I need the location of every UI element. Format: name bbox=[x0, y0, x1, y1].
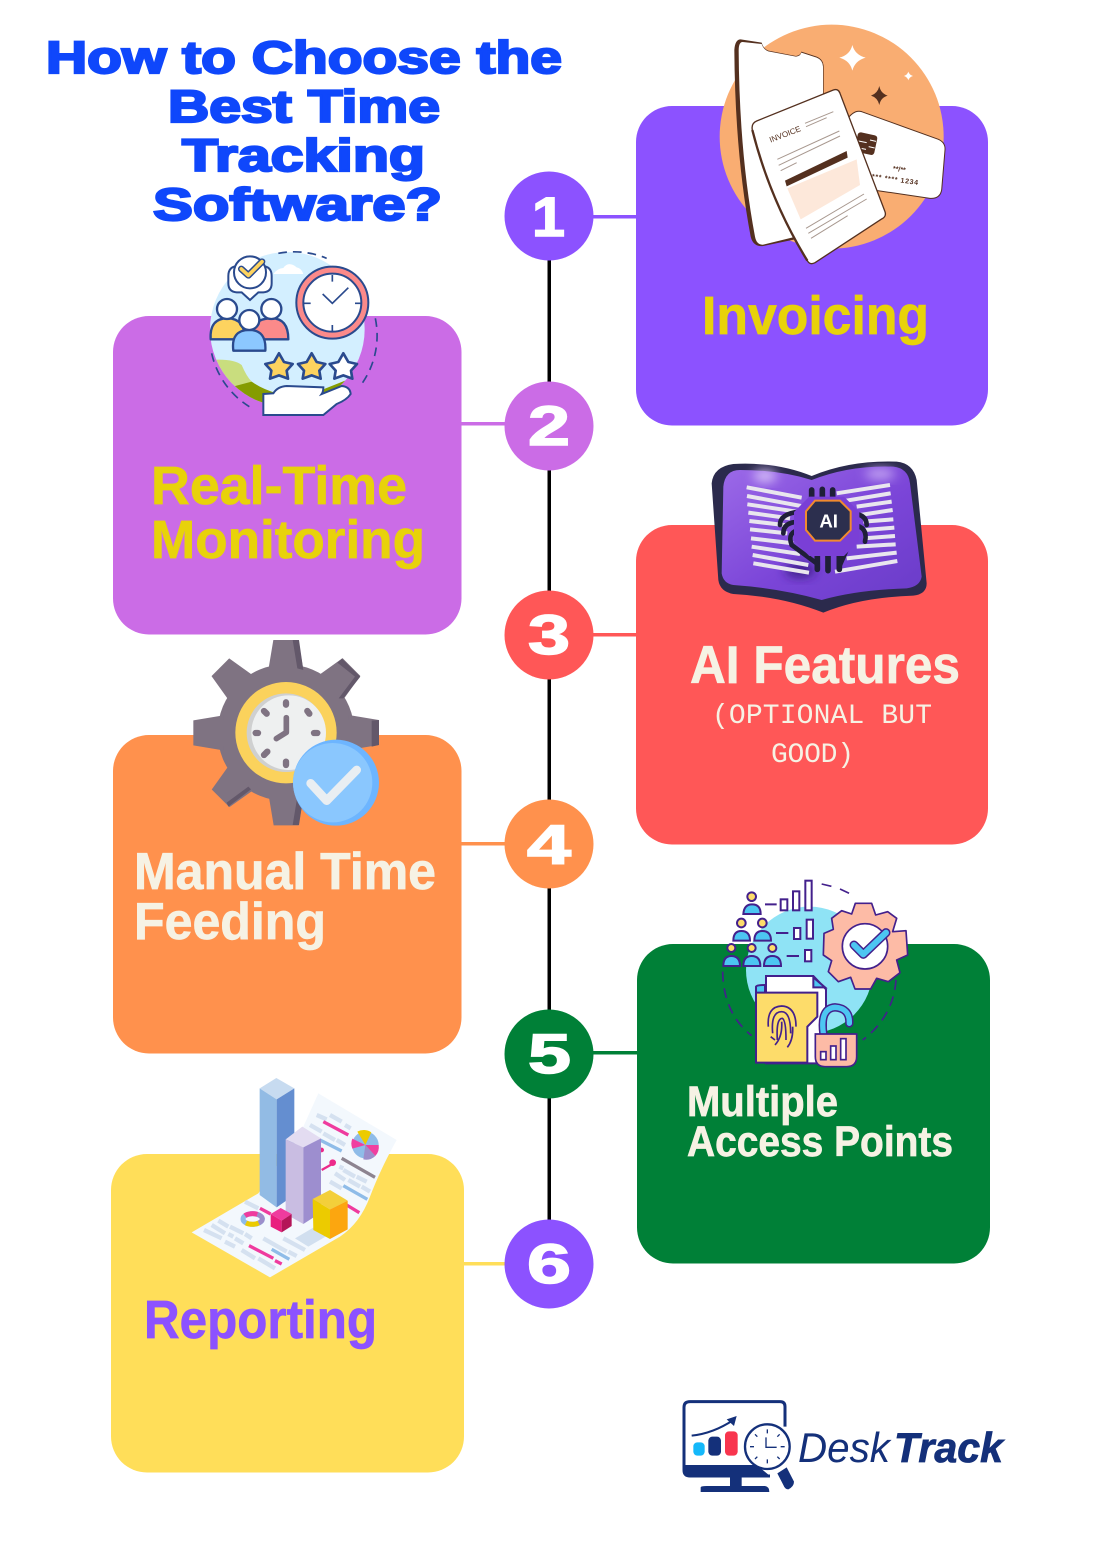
open padlock bbox=[815, 1007, 857, 1067]
step marker 3: 3 bbox=[528, 603, 570, 666]
title: Software? bbox=[153, 179, 442, 230]
yellow cube bbox=[313, 1190, 348, 1239]
title: Best Time bbox=[168, 81, 440, 132]
lilac bar bbox=[286, 1127, 321, 1224]
step marker 6: 6 bbox=[527, 1232, 571, 1295]
step marker 6 bbox=[504, 1220, 594, 1308]
connector 2 bbox=[459, 422, 507, 426]
step marker 4: 4 bbox=[527, 813, 571, 876]
step marker 4 bbox=[504, 800, 594, 888]
step marker 1 bbox=[504, 172, 594, 260]
invoice sheet bbox=[752, 90, 885, 264]
pink cube bbox=[271, 1208, 292, 1232]
people bbox=[211, 299, 288, 351]
step marker 5: 5 bbox=[528, 1022, 571, 1085]
connector 1 bbox=[590, 215, 638, 218]
gear with check bbox=[823, 903, 908, 989]
subheading: optional but good bbox=[712, 701, 932, 771]
heading: reporting: Reporting bbox=[144, 1290, 377, 1350]
logo wordmark: Track bbox=[894, 1424, 1006, 1471]
heading: manual time feeding bbox=[134, 843, 436, 951]
heading: ai features: AI Features bbox=[690, 636, 960, 695]
clock bbox=[296, 267, 368, 339]
logo icon bbox=[684, 1402, 794, 1492]
heading: invoicing: Invoicing bbox=[702, 286, 929, 346]
phone bbox=[734, 39, 824, 246]
fingerprint folder bbox=[756, 976, 826, 1063]
step marker 1: 1 bbox=[532, 185, 565, 248]
logo wordmark: Desk bbox=[798, 1424, 892, 1471]
hand bbox=[263, 386, 351, 415]
logo wordmark bbox=[798, 1424, 1006, 1471]
subheading: optional but good: GOOD) bbox=[771, 740, 854, 771]
donut chart bbox=[243, 1214, 262, 1224]
heading: real-time monitoring: Monitoring bbox=[151, 510, 425, 570]
step marker 2: 2 bbox=[528, 394, 570, 457]
heading: manual time feeding: Manual Time bbox=[134, 843, 436, 901]
connector 3 bbox=[590, 633, 638, 636]
panel: multiple access points bbox=[637, 881, 990, 1264]
invoice sheet: INVOICE bbox=[768, 124, 802, 145]
connector 6 bbox=[462, 1262, 508, 1266]
panel: invoicing bbox=[636, 25, 988, 425]
title: How to Choose the bbox=[46, 32, 562, 83]
ai chip: AI bbox=[819, 510, 838, 531]
icon: team, clock and ratings bbox=[210, 252, 377, 415]
logo: desktrack bbox=[684, 1402, 1006, 1492]
title bbox=[46, 32, 562, 230]
heading: multiple access points: Multiple bbox=[687, 1078, 838, 1126]
icon: invoice and payment card bbox=[720, 25, 945, 264]
heading: multiple access points bbox=[687, 1078, 953, 1166]
panel: reporting bbox=[111, 1078, 464, 1472]
panel: ai features bbox=[636, 462, 988, 844]
heading: real-time monitoring: Real-Time bbox=[151, 456, 407, 516]
icon: report with 3d bars bbox=[192, 1078, 397, 1277]
title: Tracking bbox=[182, 130, 425, 181]
payment card: **/** bbox=[892, 166, 906, 174]
payment card: **** **** 1234 bbox=[868, 173, 919, 187]
signal bars bbox=[765, 881, 813, 961]
heading: manual time feeding: Feeding bbox=[134, 893, 326, 951]
icon: ai book bbox=[712, 462, 927, 613]
timeline spine bbox=[548, 216, 551, 1264]
stars bbox=[265, 353, 357, 379]
heading: real-time monitoring bbox=[151, 456, 425, 570]
tall blue bar bbox=[260, 1078, 294, 1207]
panel: manual time feeding bbox=[113, 640, 462, 1054]
payment card bbox=[847, 111, 945, 198]
step marker 5 bbox=[504, 1010, 594, 1098]
rating badge bbox=[228, 256, 272, 300]
panel: real-time monitoring bbox=[113, 252, 462, 634]
step marker 2 bbox=[504, 382, 594, 470]
subheading: optional but good: (OPTIONAL BUT bbox=[712, 701, 932, 732]
connector 4 bbox=[459, 842, 507, 846]
icon: access control bbox=[723, 881, 908, 1067]
connector 5 bbox=[590, 1051, 639, 1054]
step marker 3 bbox=[504, 590, 594, 680]
people pyramid bbox=[723, 892, 781, 966]
icon: gear clock with check bbox=[193, 640, 379, 826]
heading: multiple access points: Access Points bbox=[687, 1118, 953, 1166]
pie chart bbox=[351, 1130, 379, 1160]
ai chip bbox=[780, 489, 867, 571]
